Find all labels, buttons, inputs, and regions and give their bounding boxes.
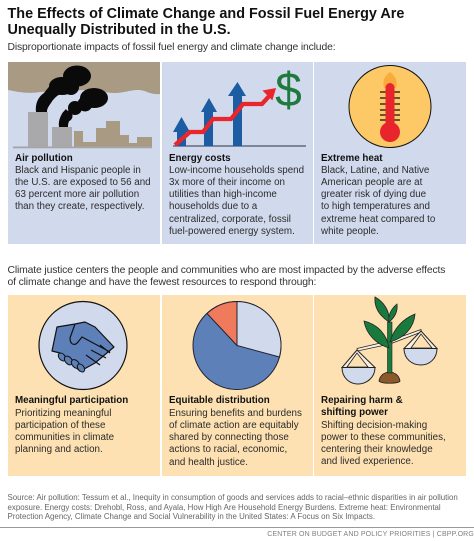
pie chart xyxy=(192,301,282,390)
title: The Effects of Climate Change and Fossil Fuel Energy Are xyxy=(8,6,404,22)
body text xyxy=(169,408,302,468)
body text: communities in climate xyxy=(15,432,114,443)
title xyxy=(8,6,404,38)
panel: air pollution xyxy=(8,62,160,244)
icon: plant and scales xyxy=(341,296,438,384)
body text: actions to racial, economic, xyxy=(169,444,287,455)
title: Unequally Distributed in the U.S. xyxy=(8,22,231,38)
source note xyxy=(8,493,458,521)
body text: Shifting decision-making xyxy=(321,420,427,431)
body text: 3x more of their income on xyxy=(169,177,285,188)
body text: American people are at xyxy=(321,177,422,188)
body text: of climate action are equitably xyxy=(169,420,299,431)
body text: Ensuring benefits and burdens xyxy=(169,408,302,419)
heading: Air pollution xyxy=(15,153,73,164)
body text: white people. xyxy=(321,226,379,237)
source note: Source: Air pollution: Tessum et al., Inequity in consumption of goods and services adds to racial–ethnic disparities in air pollution xyxy=(8,493,458,502)
body text: extreme heat compared to xyxy=(321,214,435,225)
body text: planning and action. xyxy=(15,444,103,455)
body text: than they create, respectively. xyxy=(15,201,144,212)
footer credit: CENTER ON BUDGET AND POLICY PRIORITIES | CBPP.ORG xyxy=(267,530,474,538)
body text: Prioritizing meaningful xyxy=(15,408,111,419)
body text: power to these communities, xyxy=(321,432,446,443)
panel: equitable distribution xyxy=(162,295,312,476)
body text: Black and Hispanic people in xyxy=(15,165,141,176)
body text: centralized, corporate, fossil xyxy=(169,214,291,225)
intro text: impacts: Disproportionate impacts of fossil fuel energy and climate change include: xyxy=(8,42,335,53)
body text: Low-income households spend xyxy=(169,165,304,176)
source note: Protection Agency, Climate Change and Social Vulnerability in the United States: A Focus on Six Impacts. xyxy=(8,512,375,521)
body text: fuel-powered energy system. xyxy=(169,226,295,237)
body text: utilities than high-income xyxy=(169,189,277,200)
intro text: climate justice xyxy=(8,265,446,288)
source note: exposure. Energy costs: Drehobl, Ross, and Ayala, How High Are Household Energy Burdens. Extreme heat: Environmental xyxy=(8,503,441,512)
panel: repairing harm xyxy=(314,295,466,476)
body text: households due to a xyxy=(169,201,257,212)
body text xyxy=(321,165,435,237)
body text xyxy=(169,165,304,237)
heading: Repairing harm & xyxy=(321,395,403,406)
icon: thermometer xyxy=(348,65,432,148)
heading: Energy costs xyxy=(169,153,231,164)
body text: and lived experience. xyxy=(321,456,414,467)
panel: energy costs xyxy=(162,62,312,244)
icon: handshake xyxy=(38,300,128,390)
body text: the U.S. are exposed to 56 and xyxy=(15,177,151,188)
heading: Equitable distribution xyxy=(169,395,270,406)
panel: extreme heat xyxy=(314,62,466,244)
icon: rising arrows and dollar sign xyxy=(173,64,306,147)
intro text: climate justice: of climate change and have the fewest resources to respond through: xyxy=(8,277,316,288)
body text: centering their knowledge xyxy=(321,444,433,455)
body text: 63 percent more air pollution xyxy=(15,189,139,200)
dollar sign: $ xyxy=(275,64,302,117)
divider line xyxy=(0,526,474,528)
heading: shifting power xyxy=(321,407,388,418)
body text: shared by connecting those xyxy=(169,432,289,443)
body text: to high temperatures and xyxy=(321,201,430,212)
panel: meaningful participation xyxy=(8,295,160,476)
body text: greater risk of dying due xyxy=(321,189,426,200)
heading: Extreme heat xyxy=(321,153,383,164)
heading xyxy=(321,395,403,418)
body text: participation of these xyxy=(15,420,105,431)
body text xyxy=(15,165,151,212)
icon: smokestacks and smog xyxy=(8,62,160,148)
body text xyxy=(321,420,446,467)
body text: and health justice. xyxy=(169,457,248,468)
heading: Meaningful participation xyxy=(15,395,128,406)
body text xyxy=(15,408,114,455)
intro text: climate justice: Climate justice centers the people and communities who are most impacted by the adverse effects xyxy=(8,265,445,276)
body text: Black, Latine, and Native xyxy=(321,165,429,176)
